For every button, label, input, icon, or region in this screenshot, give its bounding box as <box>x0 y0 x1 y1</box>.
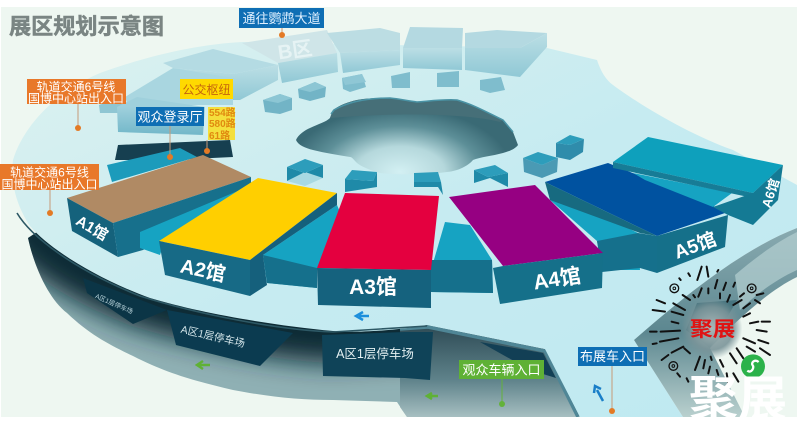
teal kiosks <box>287 135 584 195</box>
visitor hall block <box>107 148 197 182</box>
callout: visitor vehicle entrance: 观众车辆入口 <box>462 362 541 378</box>
title: 展区规划示意图 <box>9 14 164 39</box>
parking block 1 <box>83 278 167 324</box>
callout: metro exit lower <box>0 164 99 216</box>
hall A4 <box>449 185 603 304</box>
disc rim <box>17 213 427 332</box>
arrow: green parking bottom <box>427 393 438 399</box>
ramp rim <box>400 327 578 417</box>
callout: metro exit lower: 轨道交通6号线 <box>10 164 89 180</box>
B zone label: B区 <box>277 38 314 64</box>
QR radial dashes <box>650 267 770 383</box>
lower parking level <box>28 232 580 417</box>
callout: metro exit upper: 国博中心站出入口 <box>28 90 124 106</box>
ramp pit <box>400 325 580 417</box>
callout: visitor hall <box>136 107 204 160</box>
hall A2 <box>159 178 337 296</box>
mini program QR code <box>650 267 770 383</box>
central hole <box>296 98 518 174</box>
callout: bus hub <box>180 79 233 99</box>
callout: road to Yingwu Avenue <box>239 8 324 38</box>
callout: bus routes <box>204 106 236 154</box>
A1 label: A1馆 <box>73 212 111 244</box>
callout: bus hub: 公交枢纽 <box>182 82 231 97</box>
grey road ramp <box>634 228 797 417</box>
callout: exhibitor vehicle entrance: 布展车入口 <box>580 349 645 364</box>
hall A5 <box>545 163 728 273</box>
arrow: blue road <box>356 312 369 320</box>
callout: metro exit upper <box>27 79 126 131</box>
parking label 2: A区1层停车场 <box>180 323 246 350</box>
callout: metro exit lower: 国博中心站出入口 <box>1 176 98 192</box>
QR centre brand: 聚展 <box>690 318 736 341</box>
bottom white strip <box>0 417 797 426</box>
mini program badge <box>741 354 765 378</box>
hall A3 <box>317 193 439 308</box>
callout: bus routes: 61路 <box>209 129 230 142</box>
A2 label: A2馆 <box>178 255 228 286</box>
watermark: 聚展 <box>689 373 787 426</box>
callout: bus routes: 580路 <box>209 117 236 130</box>
connector A2 to A3 <box>263 205 350 288</box>
visitor hall base <box>115 140 233 160</box>
callout: visitor hall: 观众登录厅 <box>137 110 203 124</box>
A4 label: A4馆 <box>532 264 583 295</box>
A3 label: A3馆 <box>349 276 397 299</box>
parking block 3 <box>322 332 433 380</box>
callout: road to Yingwu Avenue: 通往鹦鹉大道 <box>242 11 321 26</box>
ramp dark wall <box>480 342 556 378</box>
connector A4 to A5 <box>550 200 640 270</box>
hall A1 <box>67 155 262 257</box>
callout: bus routes: 554路 <box>209 106 236 119</box>
connector A3 to A4 <box>431 222 493 293</box>
A6 label: A6馆 <box>759 177 782 210</box>
parking block 2 <box>167 310 293 366</box>
callout: visitor vehicle entrance <box>459 360 544 407</box>
A5 label: A5馆 <box>671 227 719 264</box>
hall A6 <box>613 137 783 225</box>
callout: metro exit upper: 轨道交通6号线 <box>37 79 115 94</box>
pale B-zone buildings <box>99 27 547 135</box>
callout: exhibitor vehicle entrance <box>578 347 647 414</box>
parking label 3: A区1层停车场 <box>336 346 414 361</box>
arrow: exhibitor entrance <box>594 386 603 401</box>
parking label 1: A区1层停车场 <box>94 291 135 316</box>
arrow: green parking left <box>197 361 210 369</box>
pale kiosks <box>263 71 505 114</box>
